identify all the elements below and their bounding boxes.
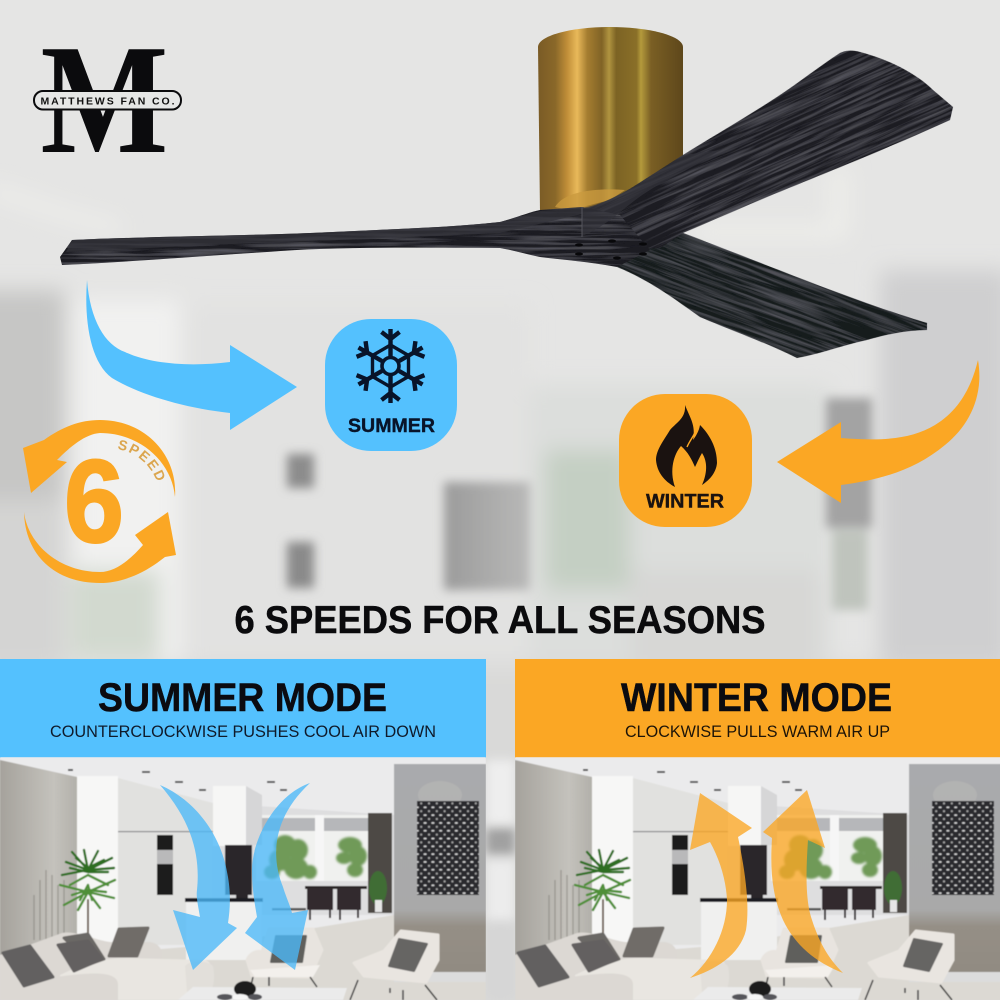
bottom circular arrow	[24, 512, 176, 583]
fan blades	[60, 0, 1000, 458]
heading: 6 SPEEDS FOR ALL SEASONS	[234, 599, 766, 642]
arrow: right warm air	[763, 790, 843, 973]
panel: winter mode	[515, 659, 1000, 758]
icon: 6 speed: SPEED	[118, 440, 164, 480]
arrow: left cool air	[160, 785, 237, 970]
panel: winter mode: CLOCKWISE PULLS WARM AIR UP	[625, 723, 890, 741]
photo: summer room with airflow	[0, 757, 486, 1000]
icon: summer badge: SUMMER	[348, 416, 435, 437]
logo: Matthews Fan Co.: MATTHEWS FAN CO.	[40, 96, 175, 108]
ceiling fan	[60, 0, 1000, 458]
logo: Matthews Fan Co.: M	[40, 12, 168, 186]
fan motor housing: brass cylinder	[538, 27, 683, 212]
arrow: right cool air	[245, 783, 310, 970]
top circular arrow	[23, 420, 175, 497]
panel: summer mode: COUNTERCLOCKWISE PUSHES COOL AIR DOWN	[50, 723, 436, 741]
icon: flame	[656, 405, 717, 487]
icon: snowflake	[354, 329, 427, 403]
icon: 6 speed: 6	[64, 436, 124, 568]
icon: summer badge	[325, 319, 457, 451]
icon: winter badge	[619, 394, 752, 527]
icon: winter badge: WINTER	[646, 492, 724, 512]
photo: winter room with airflow	[515, 757, 1000, 1000]
panel: summer mode	[0, 659, 486, 758]
arrow: left warm air	[690, 793, 752, 978]
arrow: winter orange curved	[777, 360, 979, 503]
panel: summer mode: SUMMER MODE	[98, 676, 387, 720]
arrow: summer blue curved	[86, 280, 297, 430]
panel: winter mode: WINTER MODE	[621, 676, 892, 720]
icon: 6 speed	[23, 420, 176, 583]
